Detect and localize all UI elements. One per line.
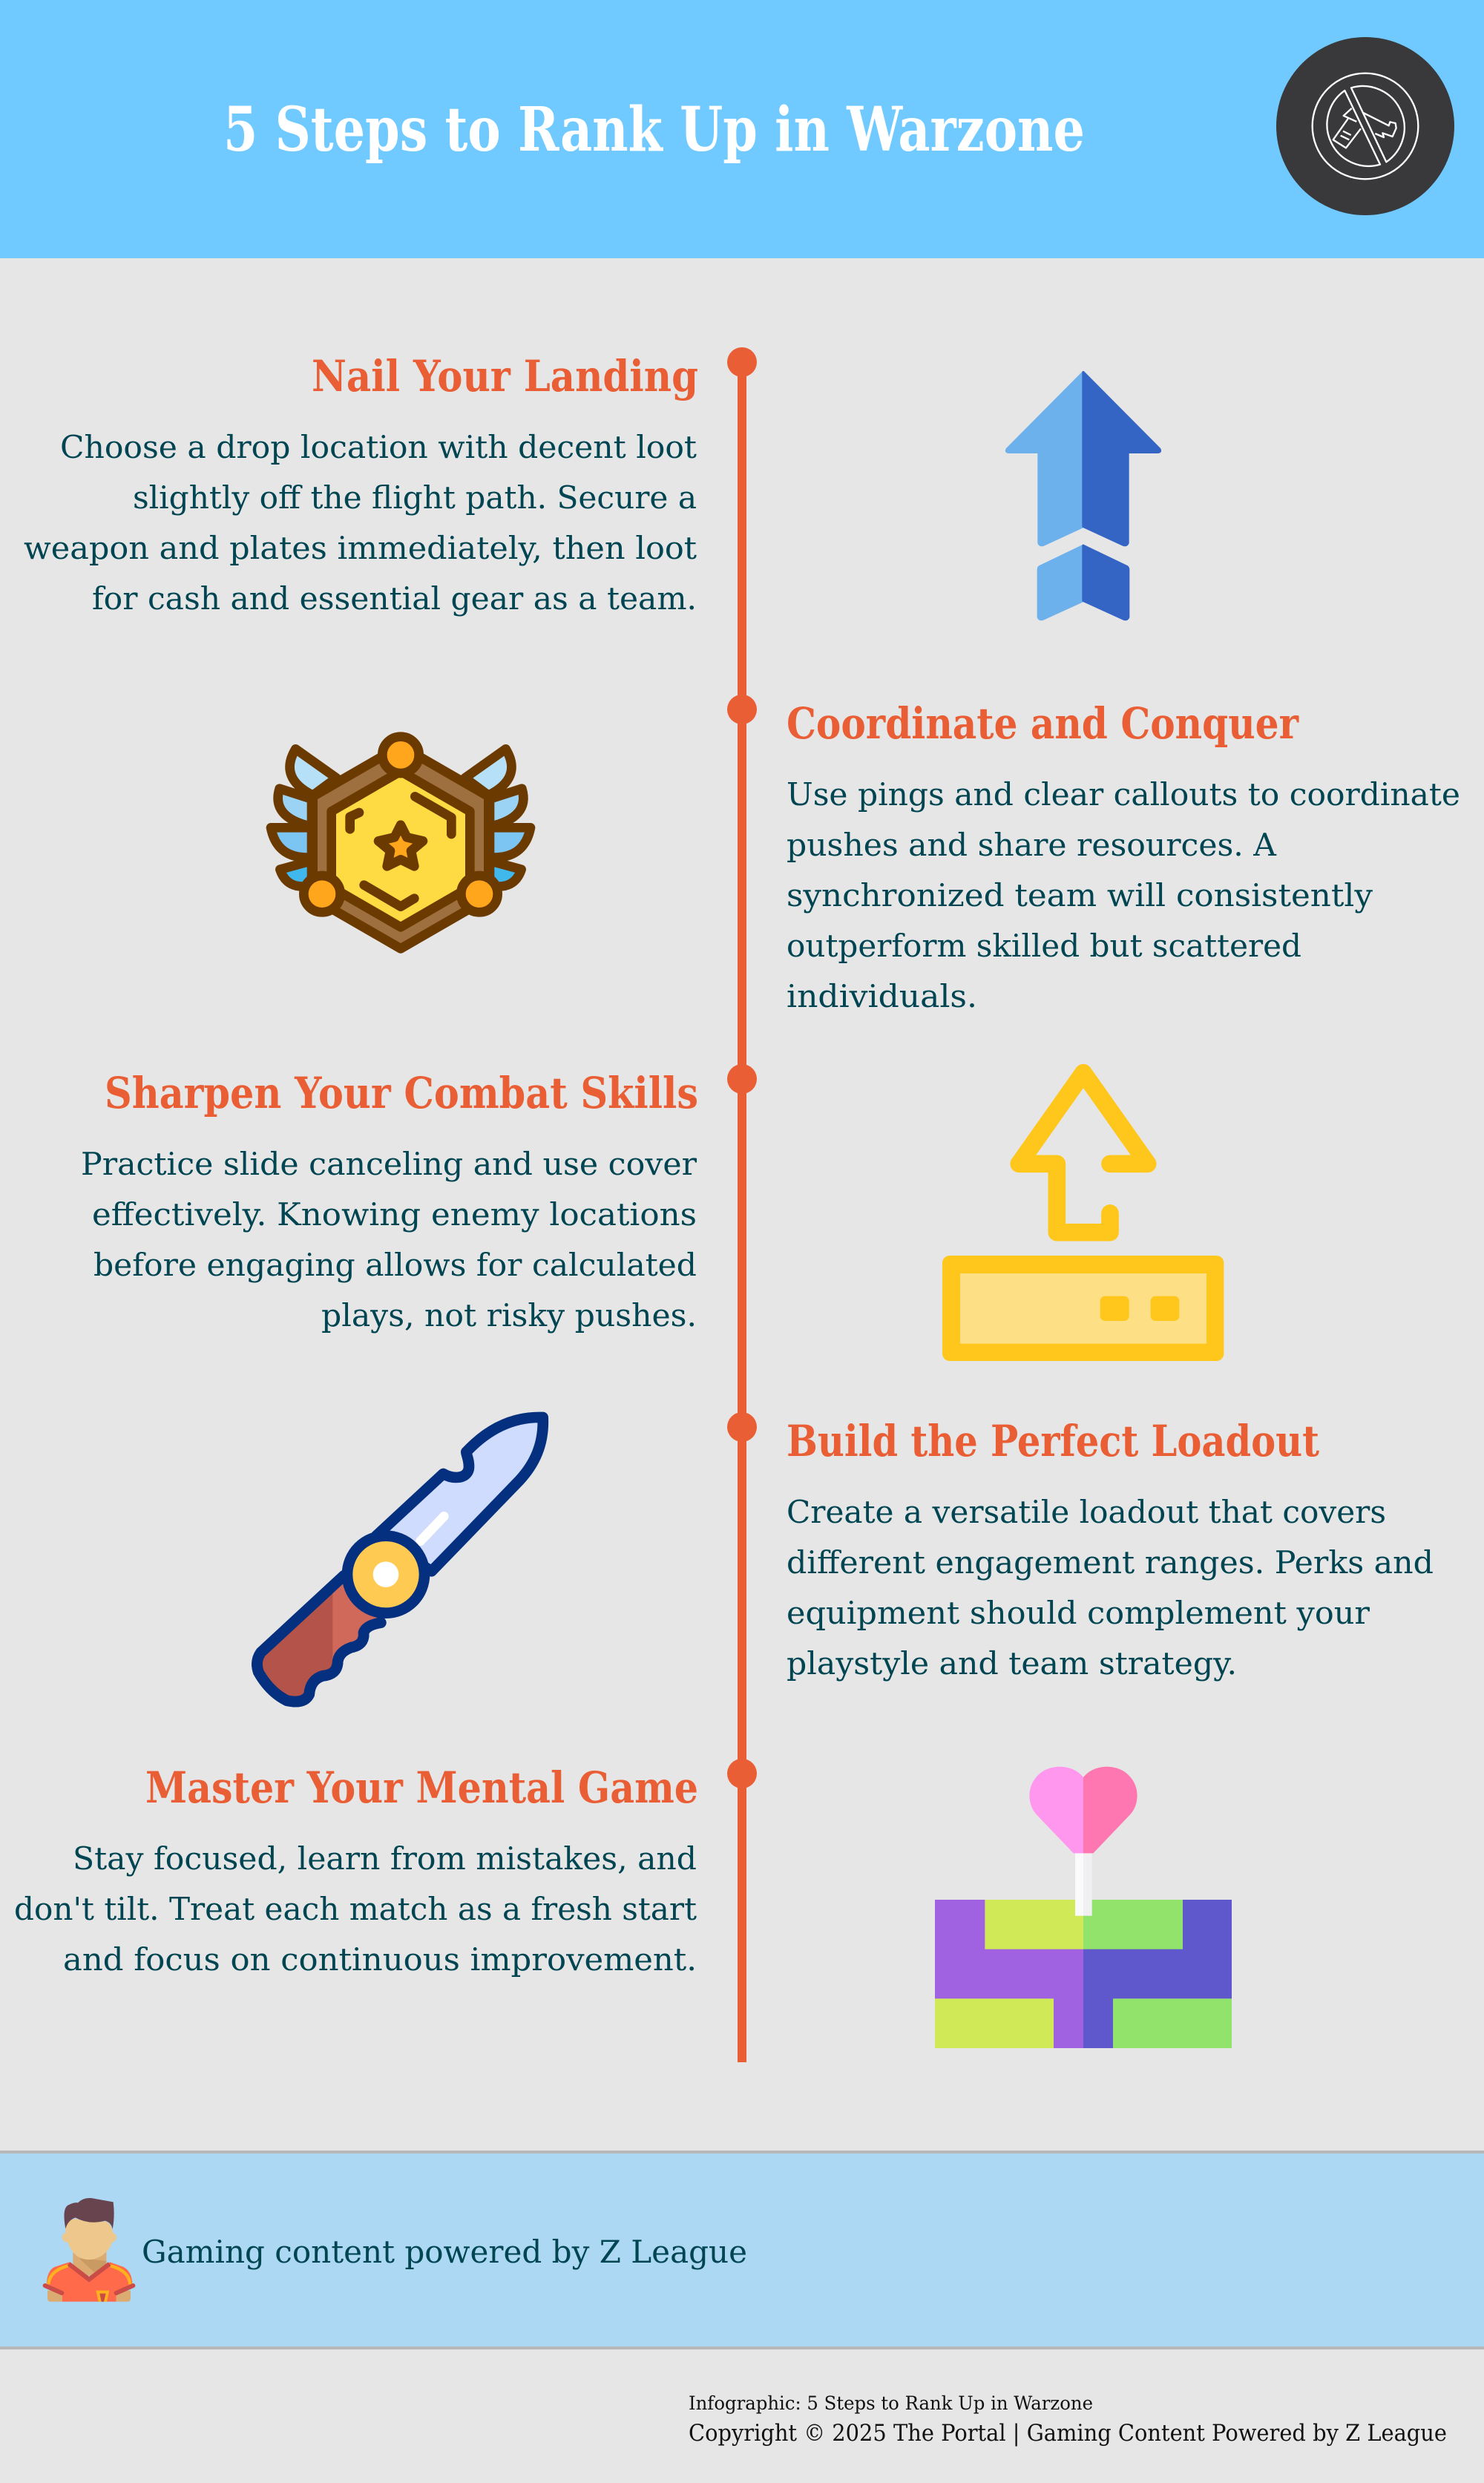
body: step 1: for cash and essential gear as a team. (92, 580, 697, 617)
heading: step 3: Sharpen Your Combat Skills (105, 1068, 698, 1118)
panel: step 1 (24, 351, 1160, 620)
body: step 2: outperform skilled but scattered (787, 928, 1301, 964)
banner: sponsor (0, 2151, 1484, 2349)
icon: joystick with heart (935, 1767, 1232, 2048)
banner text: Gaming content powered by Z League (142, 2234, 747, 2270)
body: step 4: equipment should complement your (787, 1595, 1370, 1631)
body: step 2 (787, 776, 1460, 1014)
icon: folding knife (257, 1417, 543, 1702)
panel: step 3 (81, 1068, 1224, 1361)
icon: player avatar (45, 2198, 133, 2302)
body: step 3: Practice slide canceling and use cover (81, 1146, 697, 1182)
body: step 5: don't tilt. Treat each match as a fresh start (14, 1891, 697, 1927)
header band (0, 0, 1484, 258)
footer (689, 2392, 1447, 2447)
body: step 3 (81, 1146, 697, 1334)
icon: upload arrow over drive (942, 1073, 1224, 1361)
heading: step 1: Nail Your Landing (312, 351, 698, 401)
heading: step 5: Master Your Mental Game (145, 1762, 698, 1813)
footer: copyright: Copyright © 2025 The Portal | Gaming Content Powered by Z League (689, 2420, 1447, 2447)
icon: winged medal (271, 737, 531, 948)
body: step 4 (787, 1494, 1434, 1682)
body: step 4: playstyle and team strategy. (787, 1645, 1237, 1682)
body: step 1: slightly off the flight path. Secure a (133, 479, 697, 516)
panel: step 2 (271, 698, 1460, 1014)
body: step 4: Create a versatile loadout that covers (787, 1494, 1386, 1530)
body: step 2: Use pings and clear callouts to coordinate (787, 776, 1460, 813)
body: step 3: before engaging allows for calculated (93, 1247, 697, 1283)
body: step 2: synchronized team will consistently (787, 877, 1373, 914)
body: step 1: weapon and plates immediately, then loot (24, 530, 697, 566)
body: step 2: individuals. (787, 978, 977, 1014)
title: 5 Steps to Rank Up in Warzone (223, 94, 1085, 165)
panel: step 5 (14, 1762, 1232, 2048)
icon: double up arrow (1007, 373, 1160, 620)
body: step 5: Stay focused, learn from mistakes, and (73, 1840, 697, 1877)
body: step 3: plays, not risky pushes. (321, 1297, 697, 1334)
body: step 5: and focus on continuous improvement. (63, 1941, 697, 1978)
panel: step 4 (257, 1416, 1434, 1702)
body: step 1 (24, 429, 697, 617)
timeline (727, 347, 757, 2062)
heading: step 2: Coordinate and Conquer (787, 698, 1299, 749)
body: step 5 (14, 1840, 697, 1978)
footer: infographic title: Infographic: 5 Steps to Rank Up in Warzone (689, 2392, 1093, 2414)
body: step 4: different engagement ranges. Perks and (787, 1544, 1434, 1581)
body: step 3: effectively. Knowing enemy locations (92, 1196, 697, 1233)
body: step 1: Choose a drop location with decent loot (60, 429, 697, 465)
body: step 2: pushes and share resources. A (787, 827, 1277, 863)
heading: step 4: Build the Perfect Loadout (787, 1416, 1319, 1466)
icon: no guns badge (1276, 37, 1454, 215)
